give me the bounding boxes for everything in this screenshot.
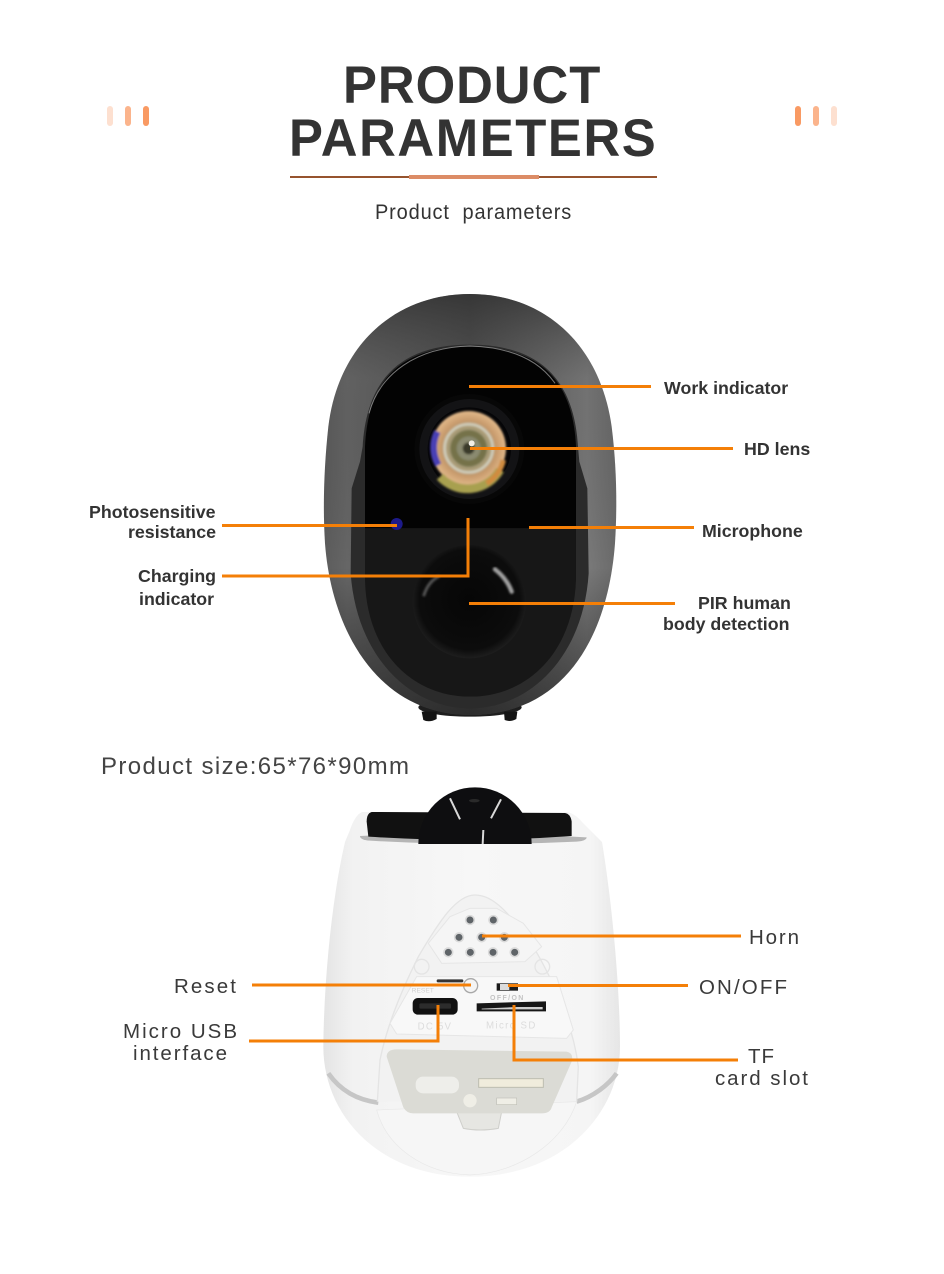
label: ON/OFF: ON/OFF <box>699 976 787 999</box>
lens <box>414 394 524 504</box>
face rim highlight <box>369 346 555 413</box>
camera shell <box>324 294 616 715</box>
screw bosses <box>414 959 550 974</box>
reset button: RESET <box>412 988 434 995</box>
label: Charging indicator: indicator <box>139 589 214 609</box>
reset button <box>412 979 478 995</box>
title <box>289 56 656 168</box>
label: Photosensitive resistance <box>89 502 216 542</box>
subtitle: Product parameters <box>375 200 571 224</box>
decorative ticks: right <box>795 106 837 126</box>
label: PIR human body detection: body detection <box>663 614 789 634</box>
product size: Product size:65*76*90mm <box>101 753 409 780</box>
rubber cover <box>387 1049 572 1130</box>
label: TF card slot: TF <box>748 1045 774 1068</box>
label: Charging indicator: Charging <box>138 566 216 586</box>
on/off switch <box>490 983 523 1002</box>
port panel <box>390 977 573 1038</box>
label: Micro USB interface <box>123 1020 237 1065</box>
label: TF card slot: card slot <box>715 1067 808 1090</box>
callout lines: front view <box>222 386 733 604</box>
label: HD lens: HD lens <box>744 439 810 459</box>
top recess <box>360 812 587 844</box>
label: Photosensitive resistance: Photosensitive <box>89 502 216 522</box>
label: Reset: Reset <box>174 975 236 998</box>
speaker holes <box>444 916 519 957</box>
label: Micro USB interface: Micro USB <box>123 1020 237 1043</box>
feet <box>418 698 522 721</box>
micro USB port <box>413 998 458 1032</box>
label: Microphone: Microphone <box>702 521 803 541</box>
white body <box>323 812 620 1177</box>
port panel outline <box>377 895 578 1102</box>
on/off switch: OFF/ON <box>490 995 523 1002</box>
black face <box>360 343 580 700</box>
lower lobe <box>377 1102 577 1175</box>
decorative ticks: left <box>107 106 149 126</box>
label: Charging indicator <box>138 566 216 609</box>
micro USB port: DC 5V <box>418 1021 452 1032</box>
photosensitive dot <box>391 518 403 530</box>
grey seam <box>328 1073 617 1103</box>
front view camera <box>324 294 616 721</box>
label: PIR human body detection: PIR human <box>698 593 791 613</box>
label: TF card slot <box>715 1045 808 1090</box>
micro SD slot <box>477 1001 546 1032</box>
PIR dome <box>418 787 532 844</box>
micro SD slot: Micro SD <box>486 1021 535 1032</box>
bezel <box>351 345 589 708</box>
rear view camera <box>323 787 620 1177</box>
label: Micro USB interface: interface <box>133 1042 227 1065</box>
speaker plate <box>428 908 542 963</box>
label: Photosensitive resistance: resistance <box>128 522 216 542</box>
label: PIR human body detection <box>663 593 791 634</box>
label: Work indicator: Work indicator <box>664 378 788 398</box>
PIR dome <box>413 545 526 658</box>
callout lines: rear view <box>249 936 741 1060</box>
title: PRODUCT <box>343 56 601 115</box>
title: PARAMETERS <box>289 109 656 168</box>
title underline <box>290 175 657 179</box>
label: Horn: Horn <box>749 926 799 949</box>
